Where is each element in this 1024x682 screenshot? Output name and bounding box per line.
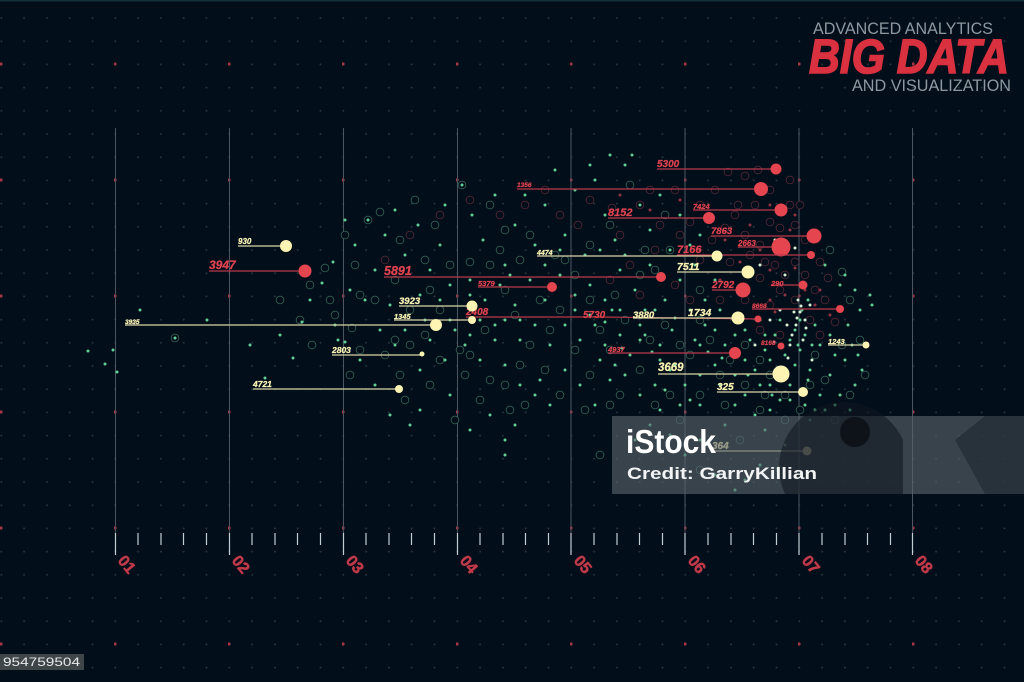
marker 8152 (608, 207, 715, 224)
marker 1243 (828, 337, 870, 348)
watermark logo: iStock (626, 423, 717, 460)
marker 7511 (677, 261, 754, 278)
marker 3935 (125, 319, 442, 331)
marker 3923 (399, 296, 478, 312)
marker 3669 (658, 362, 790, 382)
marker 7863 (711, 226, 822, 244)
marker 3669: 3669 (658, 362, 684, 374)
bright dots (755, 240, 812, 360)
marker 2803 (331, 345, 424, 356)
marker 5300 (657, 159, 782, 174)
axis ticks (116, 533, 912, 555)
marker 4474: 4474 (536, 250, 553, 257)
marker 3947: 3947 (209, 258, 237, 272)
marker 4474 (536, 250, 722, 262)
marker 4721 (252, 379, 403, 393)
marker 1356 (517, 182, 768, 196)
marker 8168: 8168 (761, 340, 776, 347)
marker 2803: 2803 (331, 345, 351, 355)
marker 1345: 1345 (394, 312, 412, 321)
image id tag (0, 654, 84, 670)
marker 3923: 3923 (399, 296, 421, 307)
marker 7166 (677, 244, 815, 259)
marker 8152: 8152 (608, 207, 632, 219)
marker 7511: 7511 (677, 261, 700, 273)
green dots (88, 155, 872, 490)
axis labels (114, 553, 935, 577)
green rings (175, 185, 865, 470)
axis labels: 01 (114, 553, 138, 577)
marker 2408 (465, 307, 762, 322)
axis labels: 03 (342, 553, 366, 577)
series: yellow markers (125, 237, 870, 456)
marker 2792 (711, 280, 750, 298)
label 5730: 5730 (583, 310, 606, 321)
marker 290: 290 (770, 279, 784, 288)
marker 1345 (394, 312, 476, 324)
marker 8668: 8668 (752, 303, 767, 310)
marker 7424 (693, 202, 788, 216)
title (809, 19, 1011, 95)
marker 1734 (688, 307, 744, 324)
marker 1734: 1734 (688, 307, 712, 319)
marker 325: 325 (717, 382, 734, 393)
watermark credit: Credit: GarryKillian (627, 464, 817, 483)
marker 2792: 2792 (711, 280, 735, 291)
marker 364: 364 (712, 441, 729, 452)
title: ADVANCED ANALYTICS (813, 19, 993, 38)
marker 4937 (607, 345, 741, 359)
red rings (385, 170, 835, 335)
marker 5379 (478, 279, 557, 292)
marker 1243: 1243 (828, 337, 846, 346)
series: red markers (209, 159, 844, 359)
red dots (620, 195, 830, 315)
marker 7166: 7166 (677, 244, 702, 256)
marker 3880 (633, 310, 738, 321)
marker 290 (770, 279, 808, 290)
axis labels: 04 (456, 553, 480, 577)
marker 7863: 7863 (711, 226, 733, 237)
marker 3880: 3880 (633, 310, 655, 321)
marker 2408: 2408 (465, 307, 489, 318)
marker 2663: 2663 (737, 239, 756, 248)
marker 325 (717, 382, 808, 397)
title: AND VISUALIZATION (852, 76, 1011, 95)
marker 4721: 4721 (252, 379, 272, 389)
marker 4937: 4937 (607, 345, 626, 354)
marker 2663 (737, 238, 790, 256)
marker 8168 (761, 340, 784, 350)
marker 930 (238, 237, 292, 252)
axis labels: 02 (228, 553, 252, 577)
axis labels: 07 (798, 553, 822, 577)
axis labels: 06 (684, 553, 708, 577)
particle cloud (88, 155, 872, 490)
marker 5891 (384, 264, 666, 282)
marker 5891: 5891 (384, 264, 412, 278)
marker 930: 930 (238, 237, 252, 246)
axis labels: 08 (911, 553, 935, 577)
axis labels: 05 (570, 553, 594, 577)
marker 3947 (209, 258, 312, 278)
watermark shapes (779, 402, 1024, 494)
image id tag: 954759504 (3, 657, 81, 669)
marker 7424: 7424 (693, 202, 711, 211)
marker 8668 (752, 303, 844, 313)
vertical axis lines (116, 128, 912, 533)
marker 1356: 1356 (517, 182, 532, 189)
marker 5300: 5300 (657, 159, 680, 170)
marker 5379: 5379 (478, 279, 496, 288)
watermark banner (612, 402, 1024, 494)
marker 364 (712, 441, 812, 456)
marker 3935: 3935 (125, 319, 140, 326)
